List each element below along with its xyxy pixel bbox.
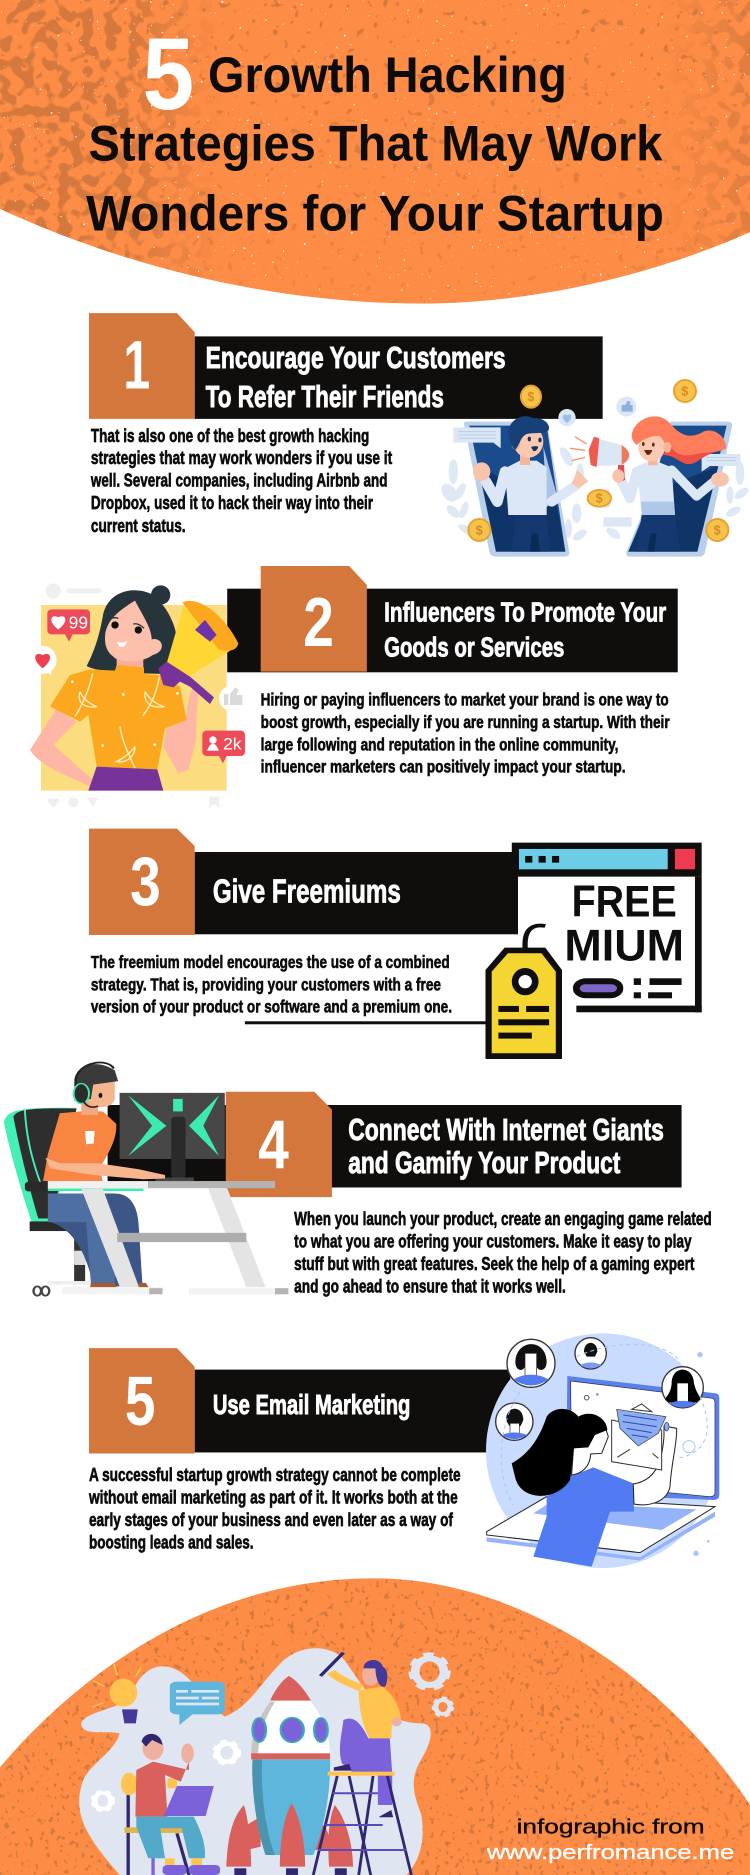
- coins: $: [681, 384, 688, 398]
- lightbulb: [92, 1664, 141, 1723]
- megaphone: [570, 437, 630, 483]
- coins: [468, 380, 728, 541]
- panel: strategy 4: [4, 1063, 712, 1297]
- number tab 1: 1: [123, 328, 150, 404]
- follower badge: 2k: [223, 734, 242, 753]
- number tab 2: 2: [303, 584, 334, 661]
- title: [86, 18, 664, 241]
- heading 2: [384, 597, 666, 663]
- header bar 3: [195, 852, 518, 934]
- title: Growth Hacking: [208, 46, 567, 103]
- speech bubbles: [453, 427, 741, 527]
- number tab 4: 4: [258, 1107, 289, 1183]
- illustration: freemium window and tag: MIUM: [564, 920, 684, 970]
- avatars: [496, 1338, 703, 1440]
- number tab 4: [226, 1092, 332, 1197]
- illustration: rocket launch team: [79, 1648, 452, 1875]
- body text 5: [88, 1464, 461, 1553]
- follower badge: [202, 731, 245, 763]
- number tab 5: 5: [125, 1363, 155, 1440]
- panel: strategy 3: [89, 829, 702, 1059]
- header bar 1: [195, 336, 603, 419]
- ladder: [313, 1772, 411, 1875]
- header bar 5: [195, 1370, 510, 1452]
- number tab 2: [261, 566, 367, 672]
- header orange shape: [0, 0, 750, 304]
- credit text: infographic from: [517, 1816, 705, 1838]
- heading 2: Goods or Services: [384, 632, 564, 663]
- illustration: gamer at desk: [4, 1063, 288, 1296]
- body text 3: [91, 953, 452, 1017]
- panel: strategy 5: [88, 1348, 510, 1553]
- body text 3: version of your product or software and a premium one.: [91, 997, 452, 1017]
- illustration: referral phones: [438, 380, 750, 557]
- body text 5: without email marketing as part of it. It works both at the: [88, 1487, 458, 1508]
- body text 2: [261, 690, 670, 777]
- man: [473, 416, 588, 552]
- body text 4: [294, 1208, 712, 1297]
- body text 3: strategy. That is, providing your customers with a free: [91, 975, 441, 994]
- body text 1: [90, 425, 393, 536]
- title: 5: [143, 18, 194, 131]
- body text 1: current status.: [91, 515, 186, 536]
- speech bubble: [170, 1682, 225, 1725]
- coins: $: [527, 390, 534, 404]
- like badge: 99: [69, 612, 88, 632]
- coins: $: [476, 523, 483, 537]
- person on ladder: [320, 1653, 402, 1817]
- heart bubble: [29, 646, 57, 675]
- accents: [501, 1345, 710, 1556]
- envelope: [612, 1404, 669, 1470]
- heading 4: [348, 1113, 664, 1180]
- body text 5: boosting leads and sales.: [89, 1532, 253, 1553]
- like badge: [47, 609, 90, 642]
- body text 1: Dropbox, used it to hack their way into their: [91, 492, 373, 513]
- number tab 1: [89, 313, 195, 419]
- gears: [92, 1654, 452, 1811]
- right phone: [626, 422, 732, 557]
- background blob: [79, 1648, 431, 1875]
- illustration: freemium window and tag: FREE: [572, 876, 677, 926]
- reaction bubbles: [558, 397, 636, 426]
- coins: $: [714, 523, 721, 537]
- number tab 3: 3: [130, 844, 161, 920]
- rocket: [226, 1676, 353, 1875]
- heading 5: Use Email Marketing: [213, 1389, 410, 1420]
- body text 5: early stages of your business and even later as a way of: [89, 1509, 453, 1530]
- number tab 3: [89, 829, 195, 935]
- woman: [30, 585, 200, 791]
- woman: [622, 416, 729, 552]
- megaphone: [158, 601, 238, 704]
- coins: $: [596, 491, 603, 505]
- thumbs up icon: [219, 686, 244, 711]
- left phone: [464, 422, 569, 557]
- body text 1: That is also one of the best growth hacking: [91, 425, 369, 446]
- heading 1: To Refer Their Friends: [206, 380, 444, 414]
- person with laptop: [121, 1734, 220, 1875]
- body text 1: strategies that may work wonders if you use it: [91, 447, 393, 468]
- heading 3: Give Freemiums: [213, 872, 401, 910]
- panel: strategy 1: [89, 313, 603, 536]
- header bar 4: [108, 1105, 682, 1187]
- illustration: email marketing: [486, 1333, 719, 1568]
- header bar 2: [227, 589, 678, 672]
- footer orange shape: [0, 1560, 750, 1875]
- panel: strategy 2: [227, 566, 678, 777]
- heading 1: [206, 341, 506, 414]
- body text 1: well. Several companies, including Airbnb and: [90, 470, 387, 491]
- number tab 5: [89, 1348, 195, 1454]
- body text 5: A successful startup growth strategy cannot be complete: [89, 1464, 461, 1485]
- credit text: [486, 1816, 734, 1864]
- illustration: freemium window and tag: [245, 843, 702, 1059]
- woman: [512, 1409, 677, 1567]
- heading 1: Encourage Your Customers: [206, 341, 506, 375]
- illustration: influencer with megaphone: [29, 583, 245, 808]
- body text 3: The freemium model encourages the use of a combined: [91, 953, 450, 972]
